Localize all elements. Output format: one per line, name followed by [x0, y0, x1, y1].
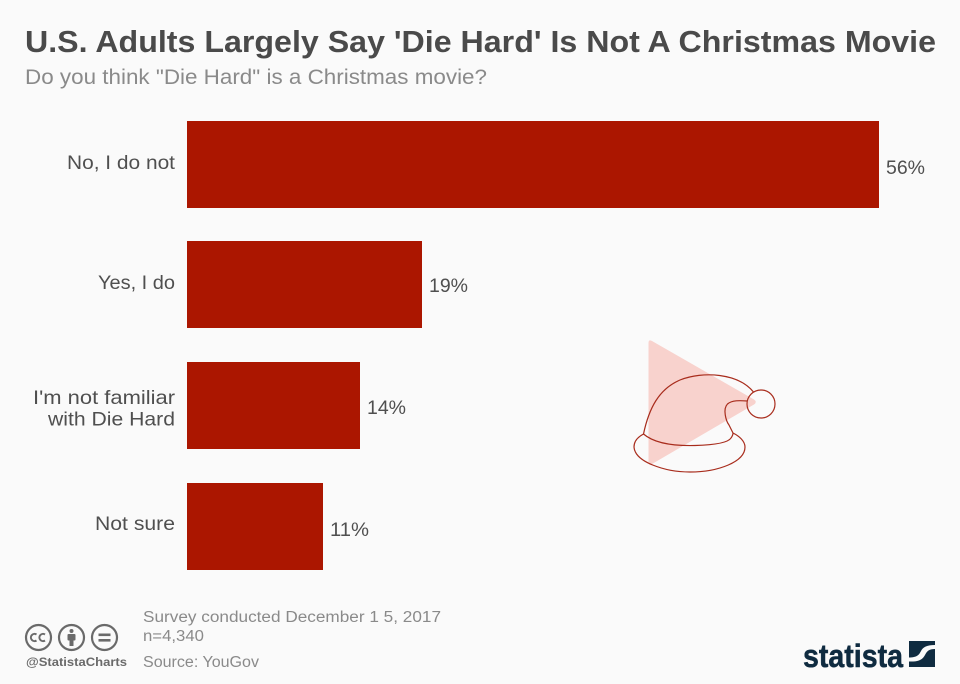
row: Yes, I do [98, 241, 468, 328]
source notes: Survey conducted December 1 5, 2017 [143, 609, 441, 626]
source notes: n=4,340 [143, 628, 204, 645]
icon: no derivatives [92, 625, 117, 650]
logo: statista [803, 638, 935, 674]
icon: play triangle [648, 340, 756, 465]
row: I'm not familiar with Die Hard: I'm not familiar [33, 387, 176, 409]
row: No, I do not: 56% [886, 157, 925, 179]
icon: creative commons licence badges [26, 625, 117, 650]
icon: cc [26, 625, 51, 650]
row: I'm not familiar with Die Hard: 14% [367, 397, 406, 419]
icon: attribution [59, 625, 84, 650]
row: Not sure: Not sure [95, 513, 175, 535]
icon: play triangle with Santa hat [634, 340, 775, 472]
row: I'm not familiar with Die Hard: with Die Hard [47, 408, 175, 430]
row: I'm not familiar with Die Hard [33, 362, 406, 449]
handle: @StatistaCharts [26, 655, 127, 669]
icon: Santa hat outline [634, 375, 775, 472]
bar chart [33, 121, 925, 570]
title: U.S. Adults Largely Say 'Die Hard' Is Not A Christmas Movie [25, 24, 936, 59]
row: Not sure [95, 483, 369, 570]
source notes [143, 609, 441, 671]
logo mark [909, 641, 935, 667]
logo wordmark: statista [803, 638, 903, 674]
subtitle: Do you think "Die Hard" is a Christmas movie? [25, 65, 487, 89]
row: Not sure: 11% [330, 519, 369, 541]
row: No, I do not [67, 121, 925, 208]
row: No, I do not: No, I do not [67, 152, 176, 174]
row: Yes, I do: 19% [429, 275, 468, 297]
source notes: Source: YouGov [143, 654, 259, 671]
row: Yes, I do: Yes, I do [98, 272, 175, 294]
